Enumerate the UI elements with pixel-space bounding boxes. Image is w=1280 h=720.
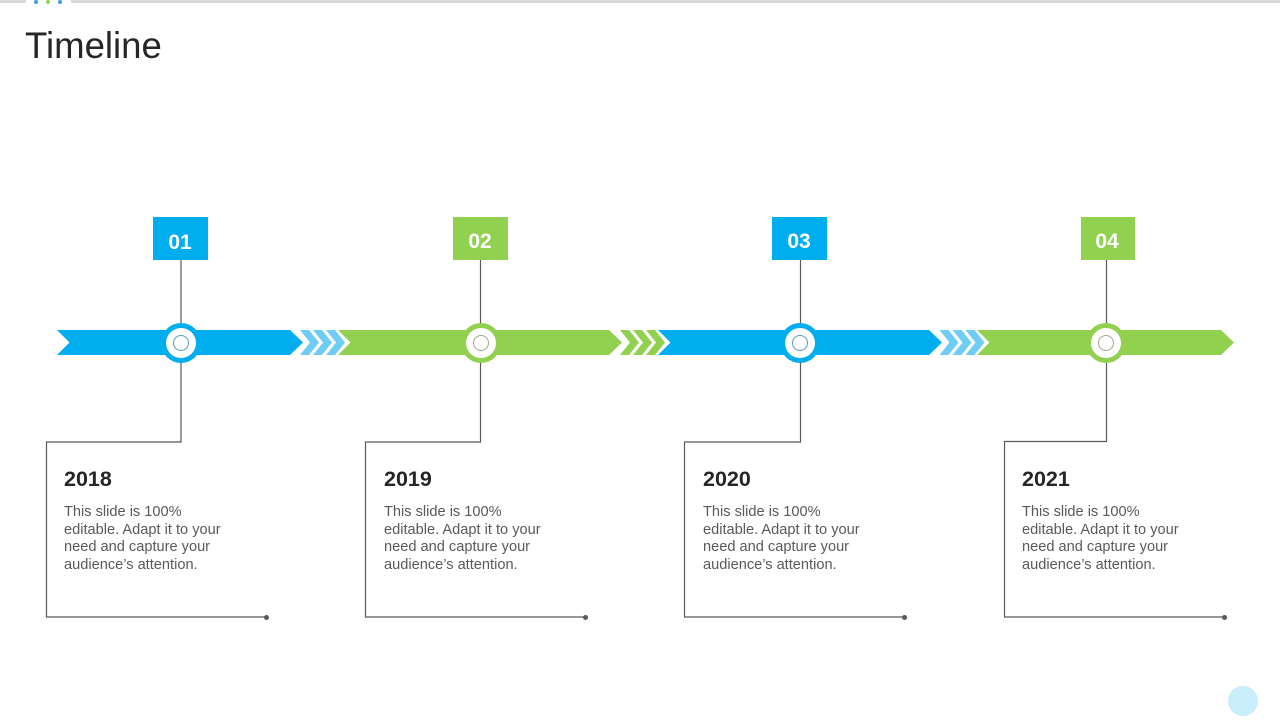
description 4: This slide is 100% [1022,504,1140,520]
step 4 [1004,217,1227,620]
description 3: audience’s attention. [703,557,837,573]
arrow segment 4 [977,330,1234,355]
chevrons: green to blue [620,330,665,355]
description 1: This slide is 100% [64,504,182,520]
number badge 02: 02 [468,230,492,253]
step 1 [46,217,269,620]
year 2019: 2019 [384,467,432,491]
description 2: editable. Adapt it to your [384,522,541,538]
connector line 3 [684,260,904,617]
number badge 03 [772,217,827,260]
description 1: editable. Adapt it to your [64,522,221,538]
description 4: need and capture your [1022,539,1168,555]
description 4: editable. Adapt it to your [1022,522,1179,538]
description 4: audience’s attention. [1022,557,1156,573]
description 3: This slide is 100% [703,504,821,520]
node 1 [161,323,201,363]
description 2: This slide is 100% [384,504,502,520]
timeline arrow band [57,330,1234,355]
number badge 01: 01 [168,231,192,254]
arrow segment 2 [338,330,622,355]
title: Timeline [25,25,162,66]
arrow segment 3 [658,330,942,355]
number badge 01 [153,217,208,260]
year 2020: 2020 [703,467,751,491]
node 3 [780,323,820,363]
end dot 4 [1222,615,1227,620]
description 1: need and capture your [64,539,210,555]
description 3: editable. Adapt it to your [703,522,860,538]
node 4 [1086,323,1126,363]
connector line 2 [366,260,585,617]
description 2: audience’s attention. [384,557,518,573]
node 2 [461,323,501,363]
year 2021: 2021 [1022,467,1070,491]
end dot 2 [583,615,588,620]
chevrons: blue to green [300,330,345,355]
description 1: audience’s attention. [64,557,198,573]
connector line 1 [46,260,266,617]
end dot 3 [902,615,907,620]
top decoration bar [0,0,1280,4]
number badge 04: 04 [1095,230,1119,253]
year 2018: 2018 [64,467,112,491]
number badge 02 [453,217,508,260]
step 2 [366,217,588,620]
connector line 4 [1004,260,1224,617]
number badge 04 [1081,217,1135,260]
end dot 1 [264,615,269,620]
arrow segment 1 [57,330,303,355]
chevrons: blue to green [940,330,984,355]
corner circle [1228,686,1258,716]
description 3: need and capture your [703,539,849,555]
description 2: need and capture your [384,539,530,555]
number badge 03: 03 [787,230,811,253]
step 3 [684,217,907,620]
